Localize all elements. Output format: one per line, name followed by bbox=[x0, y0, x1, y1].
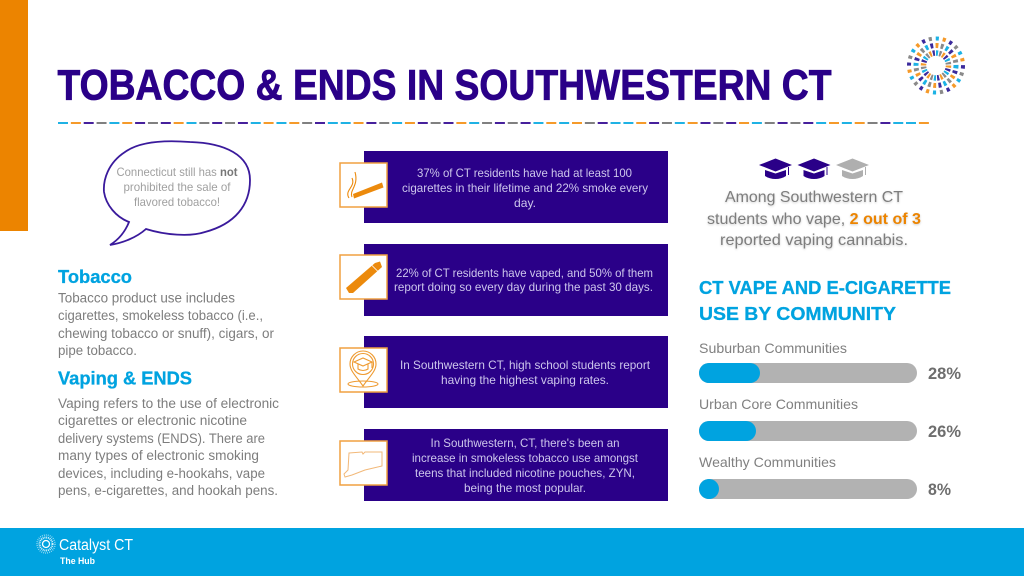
icon: footer logo bbox=[37, 535, 55, 553]
heading: CT vape and e-cigarette use bbox=[699, 277, 951, 324]
footer brand text: Catalyst CT bbox=[59, 537, 133, 554]
footer brand text: The Hub bbox=[60, 556, 95, 567]
panel: vaping statistic bbox=[340, 244, 668, 316]
heading: CT vape and e-cigarette use: CT VAPE AND E-CIGARETTE bbox=[699, 277, 951, 298]
icon: Connecticut outline bbox=[340, 441, 387, 485]
panel: speech bubble callout: Connecticut still has not bbox=[116, 165, 238, 179]
text block: vaping description: devices, including e-hookahs, vape bbox=[58, 466, 265, 481]
panel: speech bubble callout: flavored tobacco! bbox=[134, 195, 220, 209]
text block: vaping description: Vaping refers to the use of electronic bbox=[58, 396, 279, 411]
text block: vaping description: pens, e-cigarettes, and hookah pens. bbox=[58, 483, 278, 498]
bar chart: use by community bbox=[699, 341, 961, 499]
panel: vaping statistic: 22% of CT residents have vaped, and 50% of them bbox=[396, 266, 653, 280]
panel: high school vaping statistic: having the highest vaping rates. bbox=[441, 373, 609, 387]
text block: tobacco description: chewing tobacco or snuff), cigars, or bbox=[58, 326, 275, 341]
text block: tobacco description: cigarettes, smokeless tobacco (i.e., bbox=[58, 308, 263, 323]
panel: vaping statistic: report doing so every day during the past 30 days. bbox=[394, 280, 653, 294]
text block: 2 out of 3 statistic: reported vaping cannabis. bbox=[720, 232, 908, 249]
bar: urban core: Urban Core Communities bbox=[699, 397, 858, 412]
bar: wealthy bbox=[699, 455, 951, 499]
icon: vape pen bbox=[340, 255, 387, 299]
text block: tobacco description: pipe tobacco. bbox=[58, 343, 137, 358]
bar: suburban bbox=[699, 341, 961, 383]
panel: smokeless tobacco statistic: being the most popular. bbox=[464, 481, 586, 495]
text block: vaping description: delivery systems (ENDS). There are bbox=[58, 431, 265, 446]
panel: cigarette statistic bbox=[340, 151, 668, 223]
text block: 2 out of 3 statistic: Among Southwestern CT bbox=[725, 189, 903, 206]
title: TOBACCO & ENDS IN SOUTHWESTERN CT bbox=[58, 62, 832, 110]
icon: cigarette bbox=[340, 163, 387, 207]
bar: suburban: 28% bbox=[928, 365, 961, 383]
panel: speech bubble callout bbox=[104, 141, 250, 245]
bar: urban core bbox=[699, 397, 961, 441]
panel: high school vaping statistic: In Southwestern CT, high school students report bbox=[400, 358, 651, 372]
panel: smokeless tobacco statistic: teens that included nicotine pouches, ZYN, bbox=[415, 466, 635, 480]
bar: wealthy: Wealthy Communities bbox=[699, 455, 836, 470]
orange side bar bbox=[0, 0, 28, 231]
panel: cigarette statistic: day. bbox=[514, 196, 536, 210]
text block: 2 out of 3 statistic bbox=[707, 189, 921, 249]
bar: wealthy: 8% bbox=[928, 481, 951, 499]
text block: tobacco description bbox=[58, 290, 275, 358]
icon: graduation map pin bbox=[340, 348, 387, 392]
panel: speech bubble callout: prohibited the sale of bbox=[124, 180, 231, 194]
panel: smokeless tobacco statistic bbox=[340, 429, 668, 501]
panel: smokeless tobacco statistic: increase in smokeless tobacco use amongst bbox=[412, 451, 639, 465]
footer band bbox=[0, 528, 1024, 576]
text block: vaping description bbox=[58, 396, 279, 498]
heading: CT vape and e-cigarette use: USE BY COMMUNITY bbox=[699, 303, 897, 324]
text block: vaping description: many types of electronic smoking bbox=[58, 448, 259, 463]
text block: 2 out of 3 statistic: students who vape, 2 out of 3 bbox=[707, 211, 921, 228]
text block: vaping description: cigarettes or electronic nicotine bbox=[58, 413, 247, 428]
panel: smokeless tobacco statistic: In Southwestern, CT, there's been an bbox=[430, 436, 620, 450]
icon: sunburst logo bbox=[909, 38, 963, 92]
footer brand text bbox=[59, 537, 133, 567]
icon: graduation caps 2 of 3 bbox=[759, 158, 869, 179]
panel: cigarette statistic: 37% of CT residents have had at least 100 bbox=[417, 166, 632, 180]
panel: cigarette statistic: cigarettes in their lifetime and 22% smoke every bbox=[402, 181, 648, 195]
bar: urban core: 26% bbox=[928, 423, 961, 441]
panel: high school vaping statistic bbox=[340, 336, 668, 408]
heading: Tobacco: Tobacco bbox=[58, 267, 132, 287]
text block: tobacco description: Tobacco product use includes bbox=[58, 290, 235, 306]
heading: Vaping & ENDS: Vaping & ENDS bbox=[58, 368, 192, 388]
bar: suburban: Suburban Communities bbox=[699, 341, 847, 356]
